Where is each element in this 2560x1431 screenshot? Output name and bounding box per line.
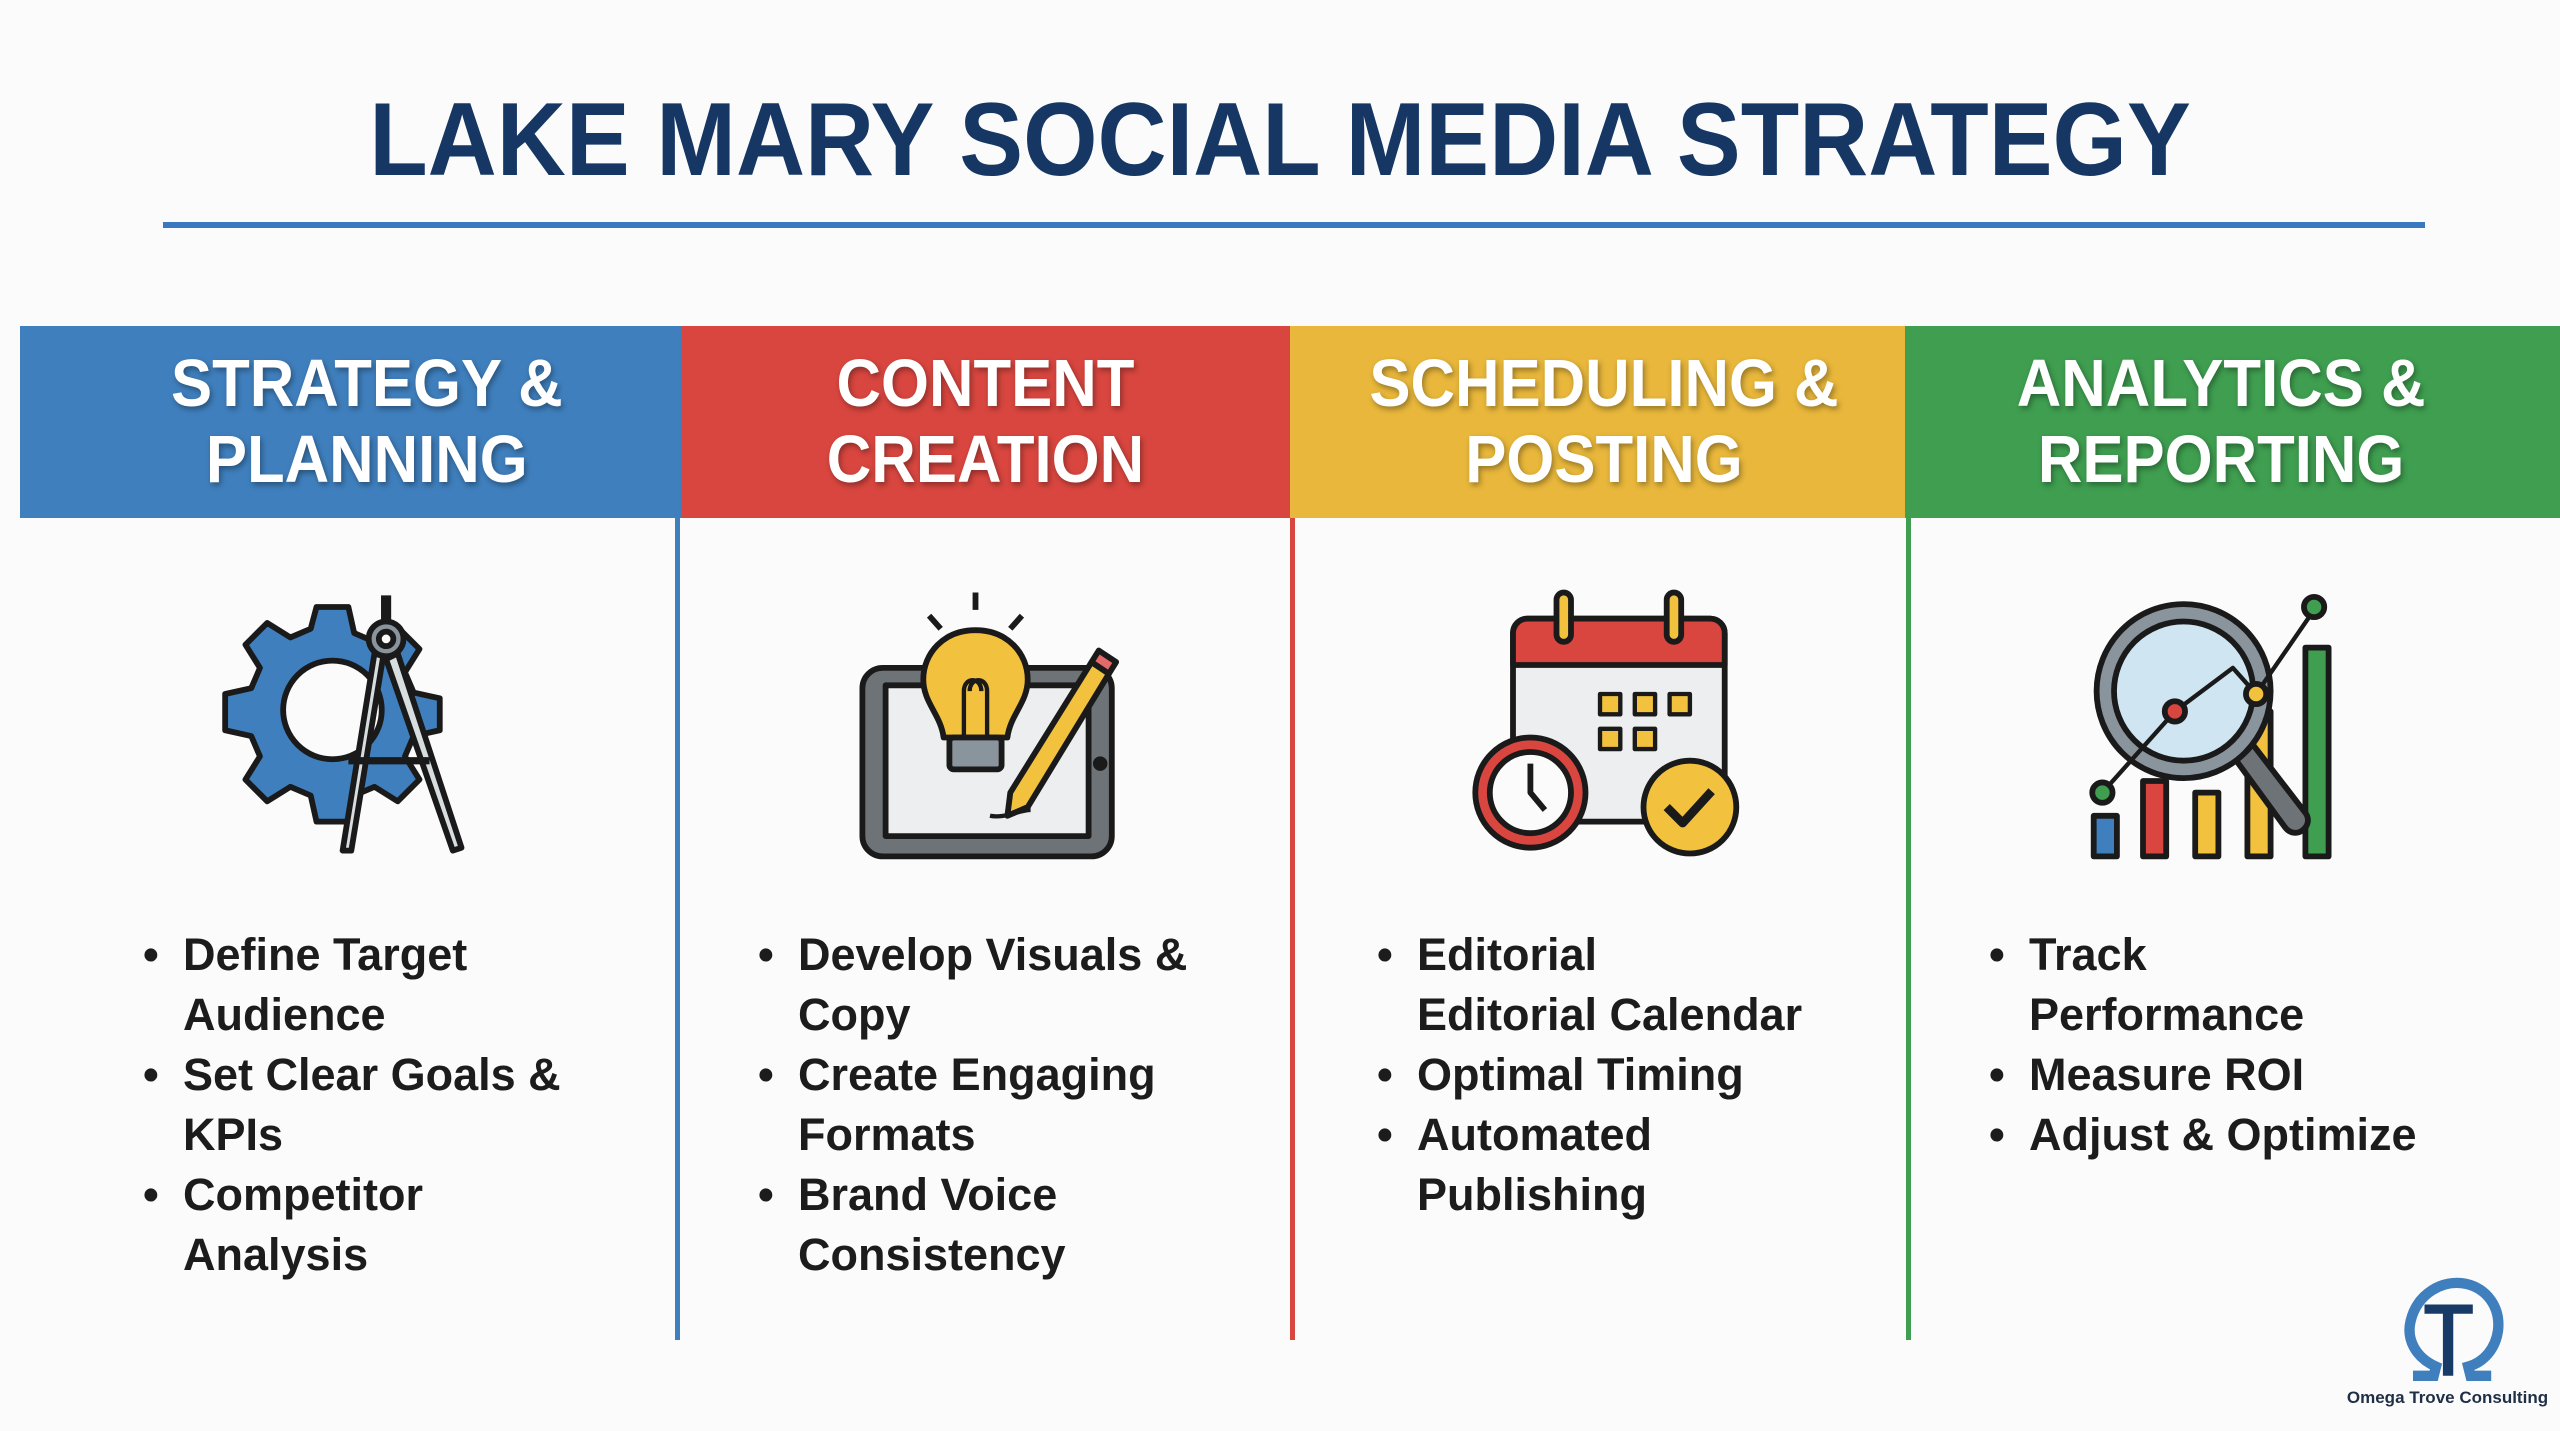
list: scheduling: Publishing (1417, 1169, 1647, 1220)
logo: Omega Trove Consulting: Omega Trove Consulting (2347, 1388, 2548, 1407)
divider red (1290, 518, 1295, 1340)
title underline (163, 222, 2425, 228)
list: analytics: Adjust & Optimize (2029, 1109, 2417, 1160)
list: content: Consistency (798, 1229, 1066, 1280)
header: content creation: CREATION (827, 422, 1144, 497)
header: strategy & planning: PLANNING (206, 422, 527, 497)
header: analytics & reporting (1905, 326, 2560, 518)
list: scheduling: Automated (1417, 1109, 1652, 1160)
list: analytics: Track (2029, 929, 2147, 980)
list: content: Brand Voice (798, 1169, 1057, 1220)
icon: tablet, lightbulb and pencil (860, 592, 1119, 860)
list: strategy: Competitor (183, 1169, 423, 1220)
header: strategy & planning: STRATEGY & (171, 346, 562, 421)
list: strategy: Analysis (183, 1229, 368, 1280)
list: strategy: KPIs (183, 1109, 283, 1160)
list: content: Formats (798, 1109, 976, 1160)
divider blue (675, 518, 680, 1340)
header: strategy & planning (20, 326, 681, 518)
list: strategy: Set Clear Goals & (183, 1049, 561, 1100)
list: analytics: Performance (2029, 989, 2304, 1040)
list: content: Develop Visuals & (798, 929, 1187, 980)
logo: Omega Trove Consulting (2347, 1278, 2548, 1407)
list: scheduling: Editorial (1417, 929, 1597, 980)
list: content: Copy (798, 989, 910, 1040)
header: analytics & reporting: REPORTING (2038, 422, 2405, 497)
list: content (759, 929, 1187, 1280)
list: content: Create Engaging (798, 1049, 1156, 1100)
list: analytics (1990, 929, 2417, 1160)
list: scheduling: Optimal Timing (1417, 1049, 1744, 1100)
header: content creation (681, 326, 1290, 518)
header: content creation: CONTENT (837, 346, 1134, 421)
header: scheduling & posting: POSTING (1465, 422, 1742, 497)
list: scheduling: Editorial Calendar (1417, 989, 1802, 1040)
list: strategy (144, 929, 561, 1280)
list: strategy: Define Target (183, 929, 467, 980)
list: scheduling (1378, 929, 1802, 1220)
list: strategy: Audience (183, 989, 386, 1040)
divider green (1906, 518, 1911, 1340)
icon: calendar, clock and check (1472, 590, 1740, 856)
header: scheduling & posting (1290, 326, 1905, 518)
header: scheduling & posting: SCHEDULING & (1369, 346, 1838, 421)
title: LAKE MARY SOCIAL MEDIA STRATEGY (369, 82, 2191, 198)
icon: magnifier and bar chart (2089, 594, 2332, 860)
list: analytics: Measure ROI (2029, 1049, 2304, 1100)
icon: gear and compass (222, 595, 464, 854)
header: analytics & reporting: ANALYTICS & (2017, 346, 2426, 421)
